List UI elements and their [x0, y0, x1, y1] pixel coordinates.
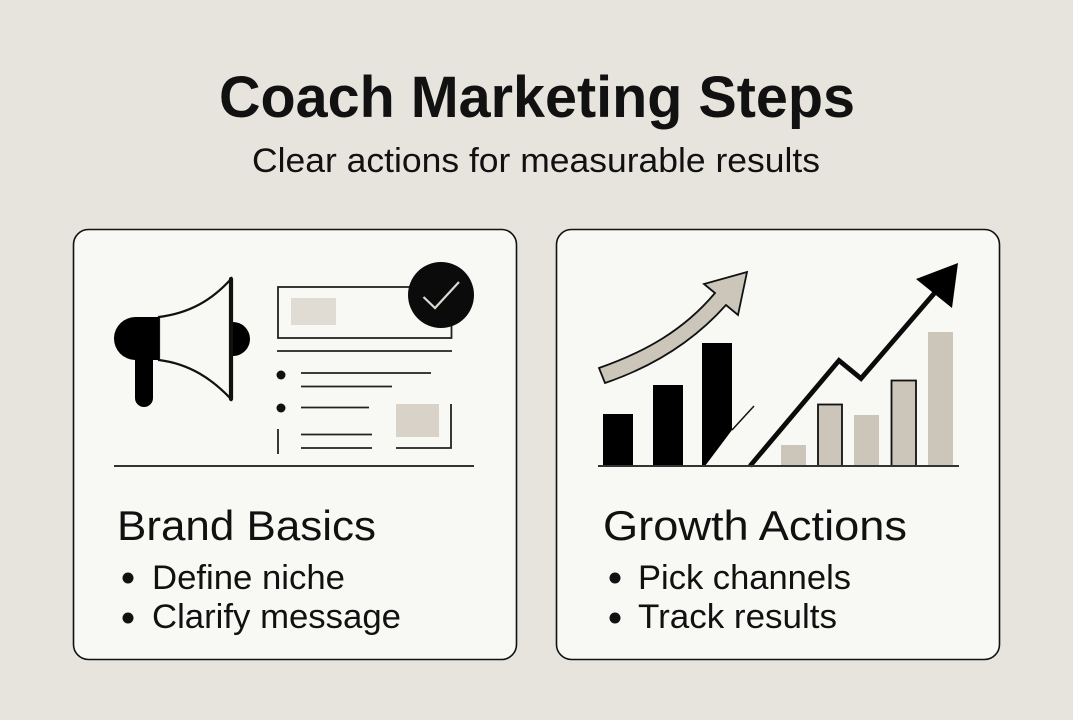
- chart: black bars with curved arrow: [599, 272, 754, 466]
- list: brand basics items: Define niche: [152, 559, 345, 597]
- icon: megaphone: [114, 279, 250, 407]
- icon: check badge: [408, 262, 474, 328]
- list: brand basics items: [122, 559, 401, 636]
- chart: tan bars with black trend arrow: [750, 263, 958, 466]
- list: brand basics items: Clarify message: [152, 598, 401, 636]
- list: growth actions items: Track results: [638, 598, 837, 636]
- heading: growth actions: Growth Actions: [603, 502, 907, 549]
- list: growth actions items: Pick channels: [638, 559, 851, 597]
- subtitle: Clear actions for measurable results: [252, 142, 820, 180]
- title: Coach Marketing Steps: [219, 65, 855, 130]
- icon: document with checklist: [276, 287, 452, 454]
- heading: brand basics: Brand Basics: [117, 502, 376, 549]
- panel: brand basics: [74, 230, 516, 660]
- list: growth actions items: [610, 559, 851, 636]
- panel: growth actions: [556, 230, 1000, 660]
